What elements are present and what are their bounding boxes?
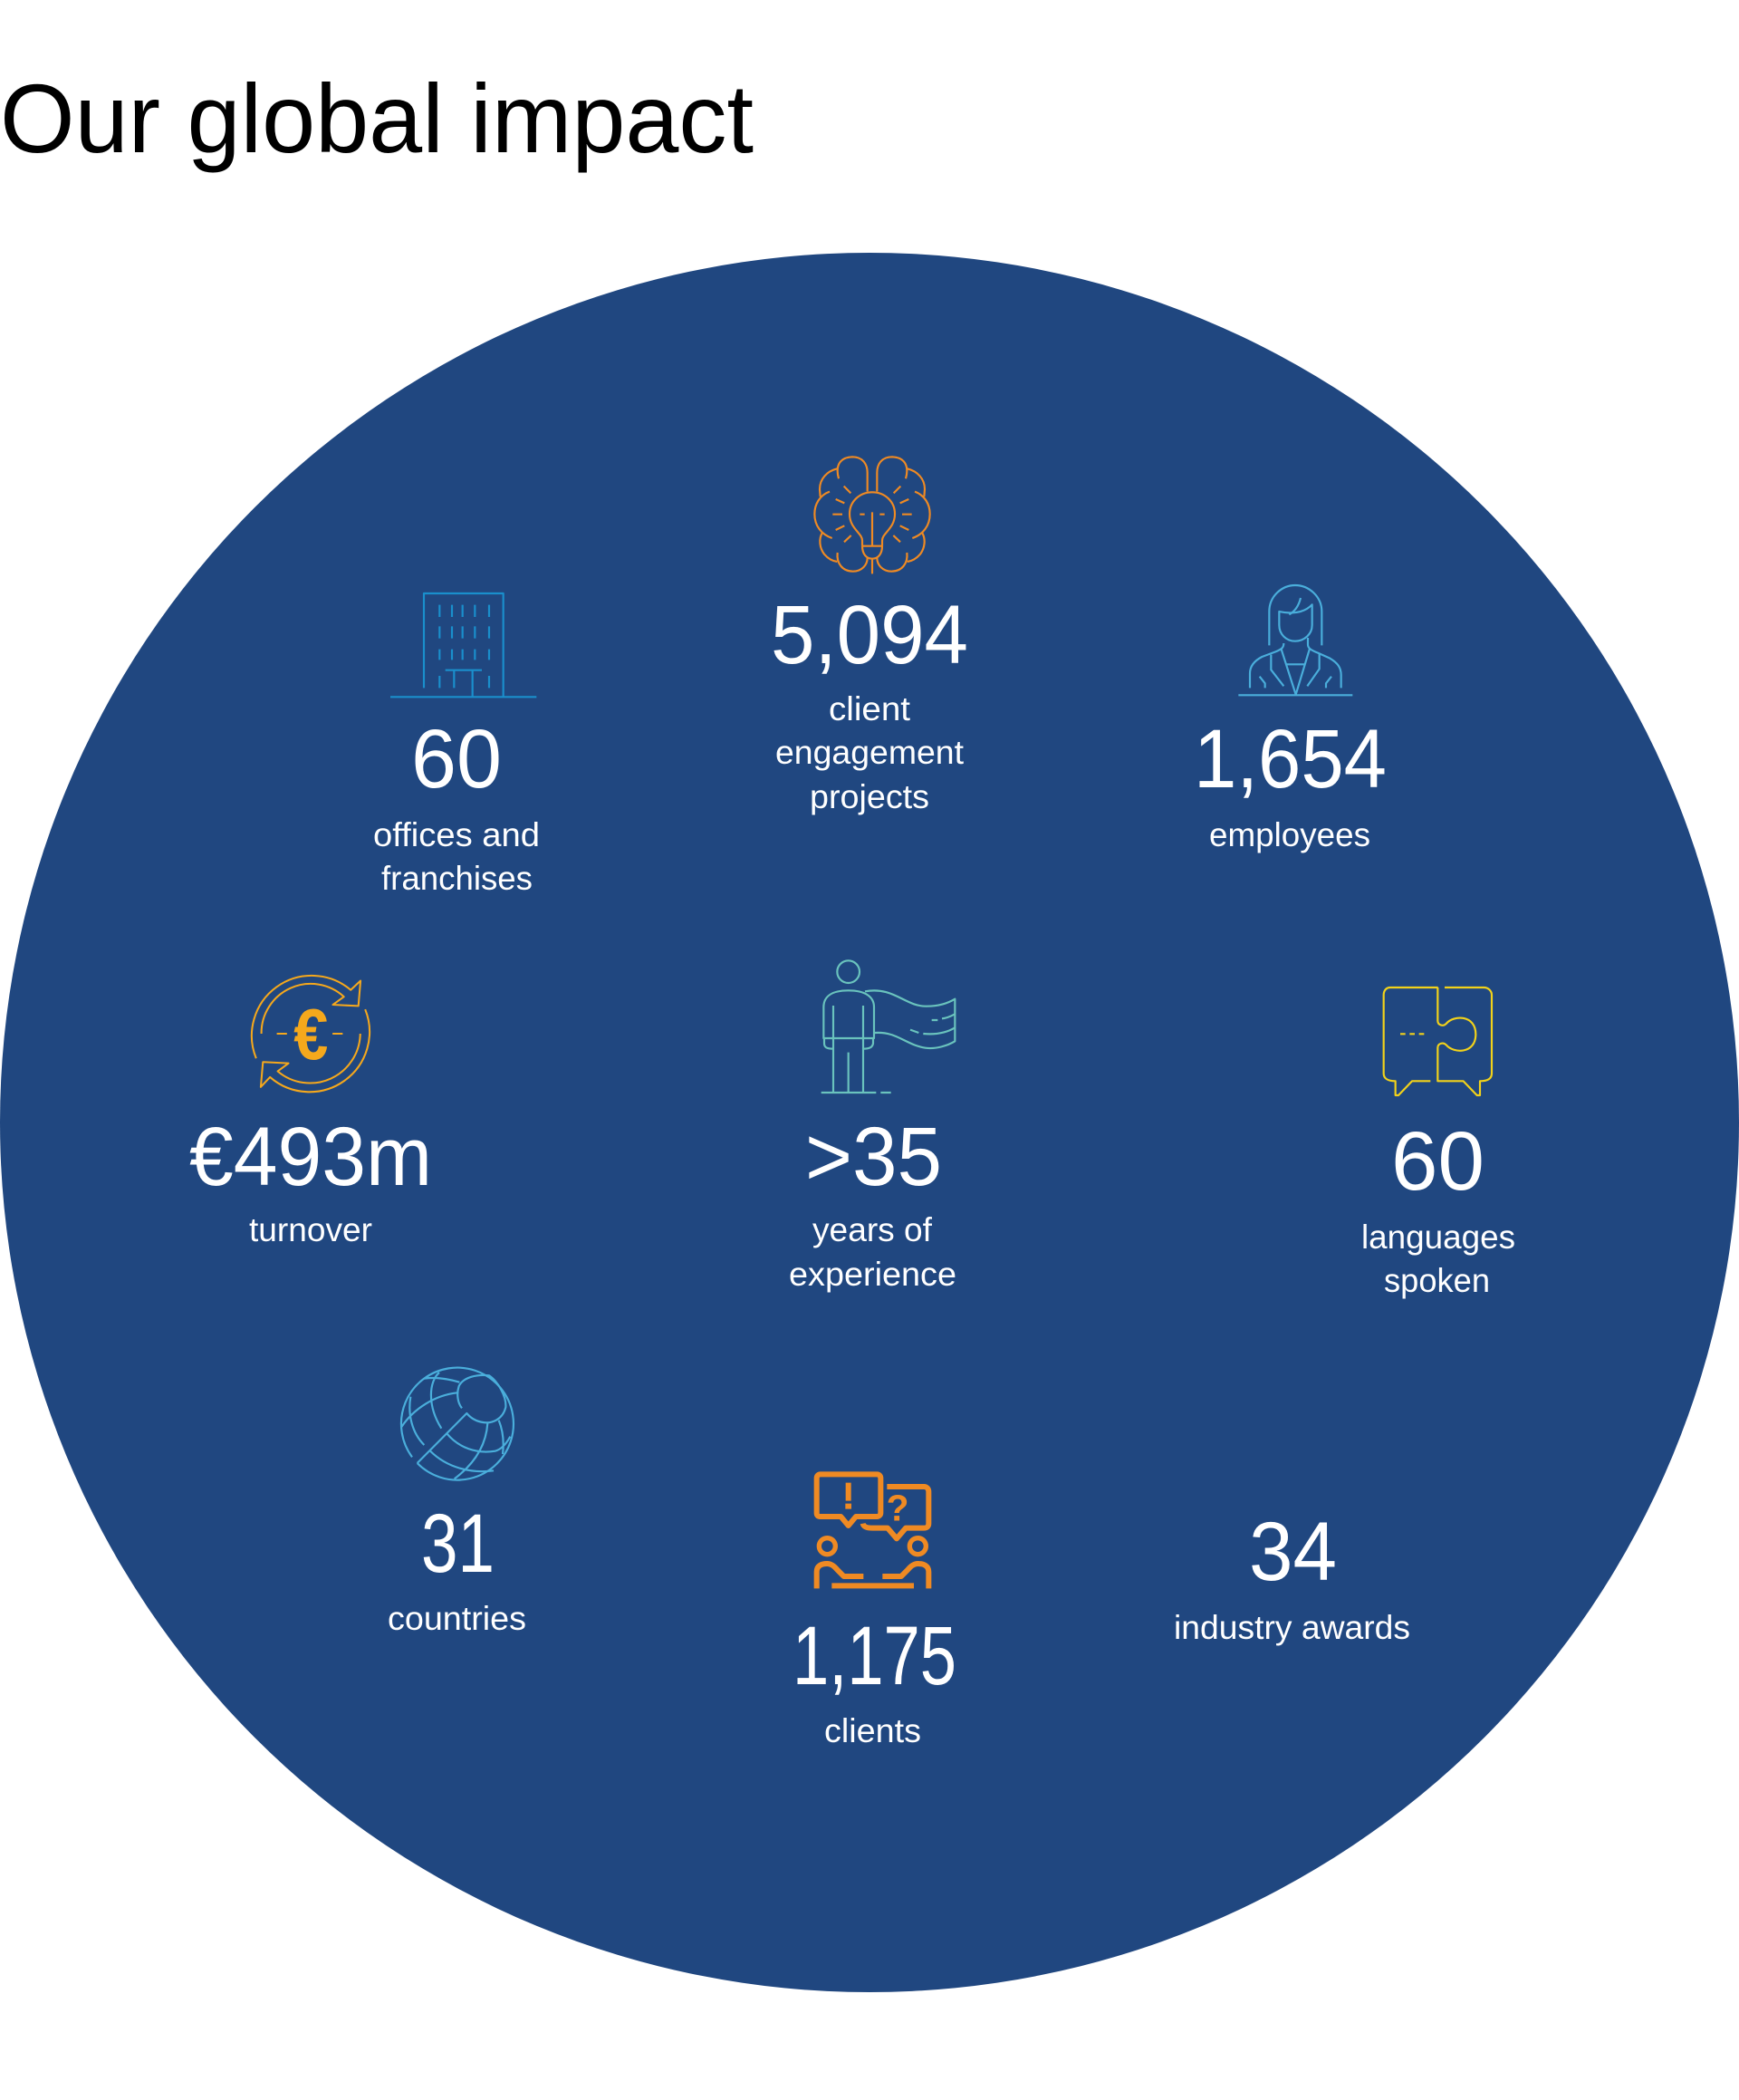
stat: years of experience bbox=[789, 960, 956, 1293]
icon: euro with circular arrows bbox=[252, 976, 370, 1092]
label: employees bbox=[1209, 816, 1370, 853]
number: 60 bbox=[411, 713, 502, 805]
label: clients bbox=[824, 1712, 921, 1749]
number: >35 bbox=[805, 1111, 942, 1203]
icon: person with flag bbox=[821, 960, 955, 1093]
stat: turnover bbox=[189, 976, 432, 1248]
number: 1,175 bbox=[793, 1610, 956, 1702]
label bbox=[1361, 1219, 1515, 1299]
label bbox=[789, 1211, 956, 1293]
label: turnover bbox=[249, 1211, 372, 1248]
icon: euro with circular arrows: € bbox=[293, 994, 328, 1074]
label: franchises bbox=[381, 860, 533, 897]
label bbox=[775, 690, 965, 815]
icon: building bbox=[390, 593, 536, 697]
label: years of bbox=[812, 1211, 933, 1248]
label: offices and bbox=[373, 816, 540, 853]
label: countries bbox=[388, 1600, 526, 1637]
label: projects bbox=[810, 778, 929, 815]
label bbox=[373, 816, 540, 897]
icon: brain with light bulb bbox=[814, 457, 930, 573]
stat: industry awards bbox=[1174, 1506, 1410, 1646]
title: Our global impact bbox=[0, 63, 754, 173]
icon: globe bbox=[401, 1368, 514, 1480]
number: 31 bbox=[421, 1498, 495, 1590]
label: spoken bbox=[1384, 1262, 1490, 1299]
label: experience bbox=[789, 1256, 956, 1293]
label: industry awards bbox=[1174, 1609, 1410, 1646]
stat: countries bbox=[388, 1368, 526, 1637]
label: engagement bbox=[775, 734, 965, 771]
label: client bbox=[829, 690, 911, 727]
number: 5,094 bbox=[771, 589, 968, 681]
icon: woman in suit bbox=[1238, 585, 1352, 695]
icon: two people with speech bubbles bbox=[817, 1474, 928, 1588]
icon: two people with speech bubbles: ? bbox=[887, 1487, 908, 1528]
number: 34 bbox=[1249, 1506, 1337, 1598]
stat: clients bbox=[793, 1474, 956, 1749]
stat: offices and franchises bbox=[373, 593, 540, 897]
stat: employees bbox=[1194, 585, 1387, 853]
stat: languages spoken bbox=[1361, 987, 1515, 1299]
label: languages bbox=[1361, 1219, 1515, 1256]
number: €493m bbox=[189, 1111, 432, 1203]
number: 60 bbox=[1391, 1115, 1484, 1208]
icon: puzzle speech bubbles bbox=[1384, 987, 1492, 1095]
stat: client engagement projects bbox=[771, 457, 968, 815]
number: 1,654 bbox=[1194, 713, 1387, 805]
